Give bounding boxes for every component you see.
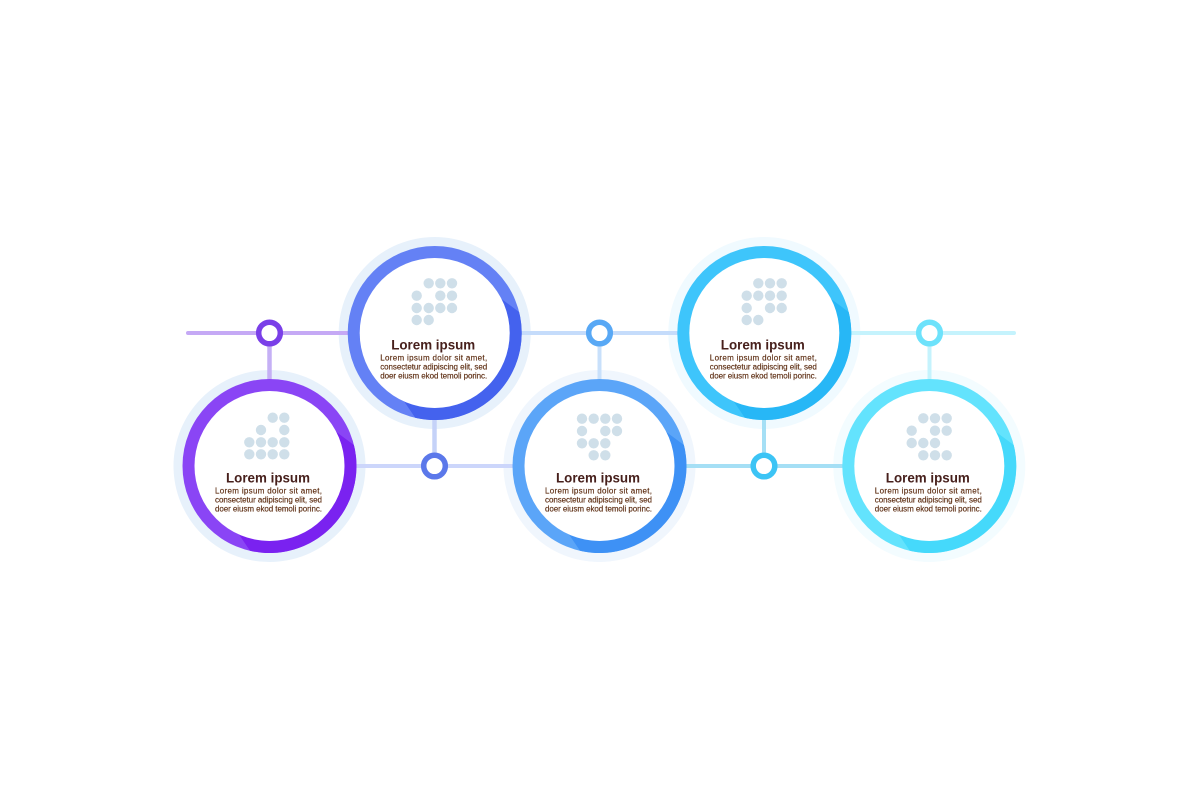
text block: consectetur adipiscing elit, sed (380, 362, 487, 372)
connector: vertical blue (598, 340, 602, 382)
text block (875, 486, 982, 514)
connector: bottom line indigo (355, 464, 516, 468)
halo: step 1 (174, 370, 366, 562)
panel: step 5 cyan circle (842, 379, 1016, 553)
text block: doer eiusm ekod temoli porinc. (215, 504, 322, 514)
heading: Lorem ipsum (556, 470, 640, 486)
text block: doer eiusm ekod temoli porinc. (380, 372, 487, 380)
connector: vertical sky (762, 418, 766, 460)
panel: step 4 sky circle (677, 246, 851, 420)
node: sky (753, 455, 775, 477)
text block: consectetur adipiscing elit, sed (215, 496, 322, 504)
node: indigo (424, 455, 445, 477)
text block (215, 486, 322, 514)
heading: Lorem ipsum (886, 470, 970, 486)
heading: Lorem ipsum (391, 336, 475, 352)
connector: top line blue (520, 331, 680, 335)
text block (380, 354, 487, 380)
icon: dot grid (244, 412, 290, 460)
text block: consectetur adipiscing elit, sed (875, 496, 982, 504)
text block (710, 354, 817, 380)
halo: step 5 (833, 370, 1025, 562)
panel: step 3 blue circle (512, 379, 686, 553)
text block: doer eiusm ekod temoli porinc. (545, 504, 652, 514)
halo: step 2 (339, 237, 531, 429)
text block: doer eiusm ekod temoli porinc. (875, 504, 982, 514)
halo: step 4 (668, 237, 860, 429)
heading: Lorem ipsum (226, 470, 310, 486)
node: blue (589, 322, 610, 344)
node: purple (259, 322, 280, 344)
icon: dot grid (412, 278, 457, 325)
connector: bottom line sky (685, 464, 846, 468)
connector: vertical indigo (432, 418, 437, 460)
halo: step 3 (504, 370, 696, 562)
connector: top line purple (188, 331, 350, 335)
text block: doer eiusm ekod temoli porinc. (710, 372, 817, 380)
text block: Lorem ipsum dolor sit amet, (875, 486, 982, 496)
panel: step 2 indigo circle (348, 246, 522, 420)
connector: vertical cyan (928, 340, 932, 382)
panel: step 1 purple circle (182, 379, 356, 553)
connector: vertical purple (267, 340, 272, 382)
heading: Lorem ipsum (721, 336, 805, 352)
text block: consectetur adipiscing elit, sed (545, 496, 652, 504)
text block: Lorem ipsum dolor sit amet, (710, 354, 817, 362)
text block: Lorem ipsum dolor sit amet, (215, 486, 322, 496)
connector: top line cyan (850, 331, 1014, 335)
text block: consectetur adipiscing elit, sed (710, 362, 817, 372)
node: cyan (919, 322, 940, 344)
text block (545, 486, 652, 514)
icon: dot grid (577, 414, 622, 460)
text block: Lorem ipsum dolor sit amet, (380, 354, 487, 362)
icon: dot grid (906, 413, 952, 460)
text block: Lorem ipsum dolor sit amet, (545, 486, 652, 496)
icon: dot grid (742, 278, 787, 325)
